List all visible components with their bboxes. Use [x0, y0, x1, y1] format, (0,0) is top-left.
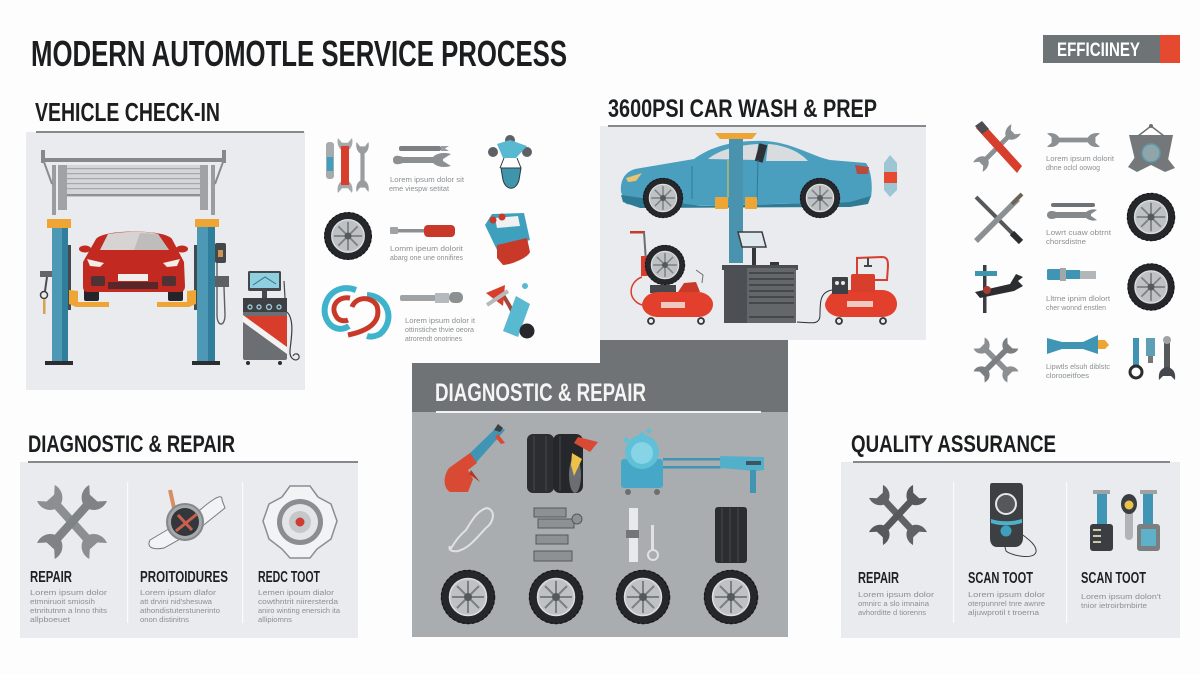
text: repair: allpboeuet — [30, 615, 71, 624]
icon: tire — [1128, 264, 1174, 310]
text: scan tool 2 — [1081, 570, 1162, 610]
text: scan tool: Lorem ipsum dolor — [968, 590, 1046, 599]
icon: rope — [449, 508, 493, 551]
icon: crossed wrenches — [36, 484, 108, 560]
central lift column — [715, 133, 757, 263]
text: scan tool: oterpunnrel tnre awnre — [968, 599, 1045, 608]
icon: wrench cross — [973, 337, 1019, 383]
text: redc toot: REDC TOOT — [258, 569, 320, 586]
icon: paired tires and jack — [527, 434, 598, 493]
icon group: right tools left column — [973, 121, 1023, 383]
panel: car wash and prep — [600, 125, 926, 340]
text: row 4: Lipwtls elsuh diblstc — [1046, 362, 1110, 371]
text: repair: etnritutnm a lnno thits — [30, 606, 107, 615]
text: scan tool 2: SCAN TOOT — [1081, 570, 1146, 587]
text: row 3: Lltrne ipnim dlolort — [1046, 294, 1111, 303]
text: row 4: clorooeitfoes — [1046, 371, 1089, 380]
panel: vehicle check-in — [26, 131, 305, 390]
text: row 1: Lorem ipsum dolorit — [1046, 154, 1115, 163]
title: MODERN AUTOMOTLE SERVICE PROCESS — [31, 33, 567, 74]
text: row 3: ottinstiche thvie oeora — [405, 325, 475, 334]
icon: brake shoes — [325, 288, 388, 337]
text: repair — [858, 570, 935, 617]
icon: scanner — [990, 483, 1036, 557]
red car — [79, 232, 188, 301]
icon: pressure gun — [445, 424, 505, 492]
text: repair: omnirc a slo imnaina — [858, 599, 930, 608]
icon: crossed wrenches — [869, 484, 927, 546]
text: repair: avhorditte d tiorenns — [858, 608, 926, 617]
text: row 2: Lowrt cuaw obtrnt — [1046, 228, 1112, 237]
icon: cross tool — [486, 283, 534, 338]
text: procedures: PROITOIDURES — [140, 569, 228, 586]
text: redc toot: cowthntrit niirersterda — [258, 597, 339, 606]
panel: diagnostic and repair — [20, 461, 358, 638]
text: redc toot — [258, 569, 341, 624]
text: procedures: att drvini nid'shesuwa — [140, 597, 213, 606]
lift arms — [69, 290, 196, 307]
text: row 3 — [1046, 294, 1111, 312]
heading: quality assurance: QUALITY ASSURANCE — [851, 431, 1056, 458]
text: repair: REPAIR — [30, 569, 72, 586]
capsule icon — [884, 155, 897, 197]
text: redc toot: allipiomns — [258, 615, 292, 624]
text: row 2: abarg one une onnifires — [390, 253, 463, 262]
icon: screwdriver cross — [976, 194, 1022, 242]
text: row 3 — [405, 316, 476, 343]
icon: screwdriver — [390, 225, 455, 237]
icon: blue bit — [1047, 335, 1109, 354]
icon: strut and wrench — [626, 508, 658, 562]
icon: wrench pair — [1047, 203, 1097, 221]
text: row 3: cher wonnd enstlen — [1046, 303, 1106, 312]
icon: bottle and wrenches — [326, 138, 369, 193]
text: scan tool 2: tnior ietroirbrnbirte — [1081, 601, 1147, 610]
diagnostic machine — [243, 271, 299, 365]
icon: red handle cross — [973, 121, 1022, 173]
icon group: right of column — [485, 135, 534, 338]
icon: stacked bars — [534, 508, 582, 561]
text group: right tools mid column — [1046, 133, 1115, 380]
panel: quality assurance — [841, 461, 1180, 638]
text group: tools column mid — [389, 146, 476, 343]
text: scan tool — [968, 570, 1046, 617]
hanging tools — [40, 243, 229, 324]
icon: blue and red block — [485, 213, 530, 265]
text: scan tool 2: Lorem ipsum dolon't — [1081, 592, 1162, 601]
text: repair: Lorem ipsum dolor — [858, 590, 935, 599]
text: scan tool: SCAN TOOT — [968, 570, 1033, 587]
icon: wheels row — [441, 570, 758, 624]
icon: brake rotor bracket — [149, 490, 225, 549]
icon: wrench — [1047, 133, 1100, 147]
icon: tire — [1127, 193, 1175, 241]
text: row 1 — [389, 175, 465, 193]
badge: efficiency: EFFICIINEY — [1057, 40, 1140, 61]
icon: tool trio — [1130, 336, 1175, 380]
text: procedures: Lorem ipsum dlafor — [140, 588, 217, 597]
text: procedures: onon distinitns — [140, 615, 189, 624]
right compressor — [797, 257, 897, 324]
text: repair: REPAIR — [858, 570, 899, 587]
text: repair: etmniruoit smiosih — [30, 597, 95, 606]
icon: gray bag — [1128, 124, 1175, 172]
text: repair: Lorem ipsum dolor — [30, 588, 108, 597]
text: row 3: atrorendt onotrines — [405, 334, 462, 343]
text: row 2 — [390, 244, 464, 262]
heading: centre: DIAGNOSTIC & REPAIR — [435, 379, 646, 407]
text: repair — [30, 569, 108, 624]
text: row 1 — [1046, 154, 1115, 172]
icon: upright tire — [715, 507, 747, 563]
icon group: right tools right column — [1127, 124, 1175, 380]
icon: blue socket — [1047, 268, 1096, 281]
text: row 2: Lomm ipeum dolorit — [390, 244, 464, 253]
text: row 2 — [1046, 228, 1112, 246]
badge: efficiency — [1043, 35, 1180, 63]
icon: socket tool — [400, 292, 463, 303]
garage door — [41, 150, 226, 215]
text: row 1: Lorem ipsum dolor sit — [390, 175, 465, 184]
workstation — [722, 232, 798, 323]
text: row 2: chorsdistne — [1046, 237, 1086, 246]
text: row 1: eme viespw setitat — [389, 184, 450, 193]
icon: pressure washer — [621, 428, 764, 495]
icon: hub — [263, 486, 337, 558]
icon: dark wrench and tbar — [975, 265, 1023, 313]
panel: diagnostic and repair centre — [412, 340, 788, 637]
icon: shock part — [488, 135, 532, 188]
lift columns — [45, 219, 220, 365]
left compressor with tire — [630, 231, 713, 324]
text: procedures — [140, 569, 228, 624]
text: row 4 — [1046, 362, 1110, 380]
heading: car wash and prep: 3600PSI CAR WASH & PREP — [608, 95, 877, 123]
icon: wrench pair — [393, 146, 451, 167]
text: redc toot: aniro winting enersich ita — [258, 606, 341, 615]
text: redc toot: Lemen ipoum dialor — [258, 588, 335, 597]
text: row 1: dhne oclcl oowog — [1046, 163, 1100, 172]
text: row 3: Lorem ipsum dolor it — [405, 316, 476, 325]
heading: diagnostic and repair: DIAGNOSTIC & REPAIR — [28, 431, 235, 458]
text: procedures: athondistuterstunerinto — [140, 606, 220, 615]
heading: vehicle check-in: VEHICLE CHECK-IN — [35, 97, 220, 127]
icon: tire — [324, 212, 372, 260]
text: scan tool: aljuwprotil t troerna — [968, 608, 1040, 617]
icon group: tools column left — [324, 138, 388, 337]
blue car — [621, 141, 872, 218]
icon: gauges — [1090, 490, 1160, 551]
